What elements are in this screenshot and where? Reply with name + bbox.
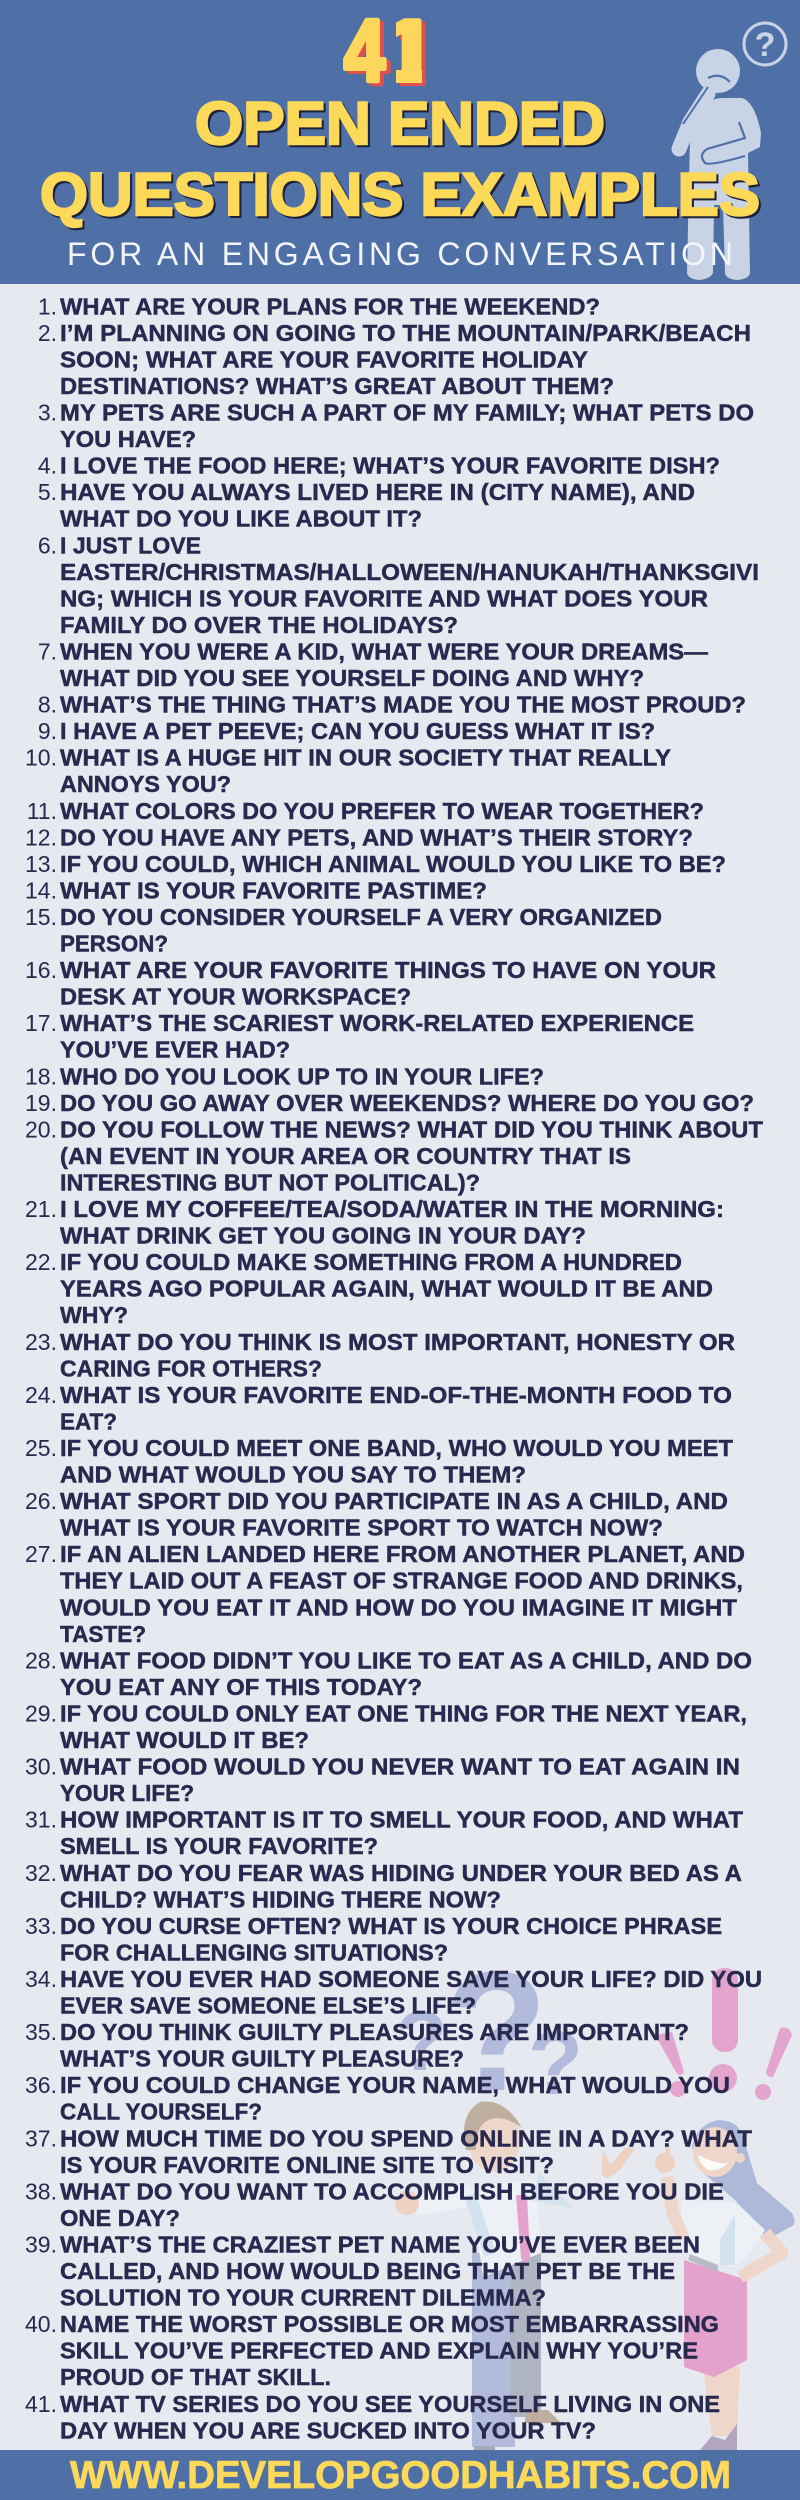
- question 17: YOU’VE EVER HAD?: [60, 1037, 290, 1063]
- subtitle: FOR AN ENGAGING CONVERSATION: [67, 236, 733, 272]
- question 24: [25, 1382, 732, 1434]
- question 17: [25, 1010, 694, 1063]
- question 3: [38, 400, 754, 452]
- question 32: WHAT DO YOU FEAR WAS HIDING UNDER YOUR BED AS A: [60, 1860, 742, 1886]
- question 6: FAMILY DO OVER THE HOLIDAYS?: [60, 612, 458, 638]
- title: [40, 90, 760, 228]
- question 18: 18.: [25, 1063, 57, 1089]
- icon: thinking person: [679, 23, 786, 280]
- question 17: 17.: [25, 1010, 57, 1036]
- question 2: 2.: [38, 320, 57, 346]
- question 21: I LOVE MY COFFEE/TEA/SODA/WATER IN THE MORNING:: [60, 1196, 724, 1222]
- question 14: WHAT IS YOUR FAVORITE PASTIME?: [60, 877, 487, 903]
- question 32: [25, 1860, 742, 1912]
- question 4: 4.: [38, 453, 57, 479]
- question 25: IF YOU COULD MEET ONE BAND, WHO WOULD YOU MEET: [60, 1435, 733, 1461]
- question 16: [25, 957, 716, 1010]
- question 24: EAT?: [60, 1408, 117, 1434]
- question 16: WHAT ARE YOUR FAVORITE THINGS TO HAVE ON YOUR: [60, 957, 716, 983]
- question 25: AND WHAT WOULD YOU SAY TO THEM?: [60, 1462, 526, 1488]
- question 37: IS YOUR FAVORITE ONLINE SITE TO VISIT?: [60, 2152, 554, 2178]
- question 21: [25, 1196, 724, 1249]
- question 27: TASTE?: [60, 1621, 146, 1647]
- question 14: 14.: [25, 877, 57, 903]
- question 35: [25, 2019, 689, 2072]
- question 13: IF YOU COULD, WHICH ANIMAL WOULD YOU LIKE TO BE?: [60, 851, 726, 877]
- question 11: 11.: [27, 798, 57, 824]
- question 6: [38, 532, 759, 638]
- question 34: [25, 1966, 762, 2018]
- question 38: 38.: [25, 2178, 57, 2204]
- question 20: (AN EVENT IN YOUR AREA OR COUNTRY THAT IS: [60, 1143, 631, 1169]
- question 34: 34.: [25, 1966, 57, 1992]
- question 3: MY PETS ARE SUCH A PART OF MY FAMILY; WHAT PETS DO: [60, 400, 754, 426]
- question 36: IF YOU COULD CHANGE YOUR NAME, WHAT WOULD YOU: [60, 2072, 730, 2098]
- question 2: DESTINATIONS? WHAT’S GREAT ABOUT THEM?: [60, 373, 614, 399]
- question 20: DO YOU FOLLOW THE NEWS? WHAT DID YOU THINK ABOUT: [60, 1116, 763, 1142]
- question 36: CALL YOURSELF?: [60, 2099, 262, 2125]
- question 8: 8.: [38, 692, 57, 718]
- question 31: HOW IMPORTANT IS IT TO SMELL YOUR FOOD, AND WHAT: [60, 1807, 743, 1833]
- question 15: PERSON?: [60, 930, 168, 956]
- question 35: WHAT’S YOUR GUILTY PLEASURE?: [60, 2046, 464, 2072]
- footer band: [0, 2450, 800, 2500]
- question 28: 28.: [25, 1647, 57, 1673]
- question 15: DO YOU CONSIDER YOURSELF A VERY ORGANIZED: [60, 904, 662, 930]
- question 39: WHAT’S THE CRAZIEST PET NAME YOU’VE EVER BEEN: [60, 2232, 700, 2258]
- question 31: 31.: [25, 1807, 57, 1833]
- question 6: I JUST LOVE: [60, 532, 201, 558]
- question 40: PROUD OF THAT SKILL.: [60, 2364, 331, 2390]
- question 33: [25, 1913, 722, 1965]
- illustration: man: [395, 2102, 635, 2450]
- question 5: HAVE YOU ALWAYS LIVED HERE IN (CITY NAME), AND: [60, 479, 695, 505]
- question 23: CARING FOR OTHERS?: [60, 1355, 322, 1381]
- question 10: ANNOYS YOU?: [60, 771, 231, 797]
- question 39: SOLUTION TO YOUR CURRENT DILEMMA?: [60, 2285, 546, 2311]
- question 36: 36.: [25, 2072, 57, 2098]
- question 29: WHAT WOULD IT BE?: [60, 1727, 309, 1753]
- question 11: WHAT COLORS DO YOU PREFER TO WEAR TOGETHER?: [60, 798, 704, 824]
- question 33: FOR CHALLENGING SITUATIONS?: [60, 1939, 448, 1965]
- illustration: question marks: ?: [396, 1994, 447, 2088]
- question 12: 12.: [25, 824, 57, 850]
- question 7: 7.: [38, 638, 57, 664]
- question 5: WHAT DO YOU LIKE ABOUT IT?: [60, 506, 422, 532]
- illustration: question marks: ?: [528, 2014, 583, 2114]
- question 2: I’M PLANNING ON GOING TO THE MOUNTAIN/PARK/BEACH: [60, 320, 751, 346]
- question 17: WHAT’S THE SCARIEST WORK-RELATED EXPERIENCE: [60, 1010, 694, 1036]
- question 20: INTERESTING BUT NOT POLITICAL)?: [60, 1170, 480, 1196]
- question 12: DO YOU HAVE ANY PETS, AND WHAT’S THEIR STORY?: [60, 824, 693, 850]
- question 38: ONE DAY?: [60, 2205, 180, 2231]
- question 22: [25, 1249, 713, 1328]
- question 6: NG; WHICH IS YOUR FAVORITE AND WHAT DOES YOUR: [60, 585, 708, 611]
- title: QUESTIONS EXAMPLES: [40, 161, 760, 228]
- title number 41: 4: [344, 1, 385, 100]
- question 22: WHY?: [60, 1302, 128, 1328]
- question 10: [25, 745, 671, 797]
- question 2: SOON; WHAT ARE YOUR FAVORITE HOLIDAY: [60, 346, 588, 372]
- question 27: IF AN ALIEN LANDED HERE FROM ANOTHER PLANET, AND: [60, 1541, 745, 1567]
- question 33: 33.: [25, 1913, 57, 1939]
- question 40: SKILL YOU’VE PERFECTED AND EXPLAIN WHY YOU’RE: [60, 2338, 698, 2364]
- question 37: HOW MUCH TIME DO YOU SPEND ONLINE IN A DAY? WHAT: [60, 2125, 752, 2151]
- question 40: [25, 2311, 719, 2390]
- question 39: CALLED, AND HOW WOULD BEING THAT PET BE THE: [60, 2258, 675, 2284]
- question 35: DO YOU THINK GUILTY PLEASURES ARE IMPORTANT?: [60, 2019, 689, 2045]
- question 34: EVER SAVE SOMEONE ELSE’S LIFE?: [60, 1992, 476, 2018]
- illustration: question marks: ?: [444, 1937, 548, 2127]
- question 30: 30.: [25, 1754, 57, 1780]
- question 7: WHEN YOU WERE A KID, WHAT WERE YOUR DREAMS—: [60, 638, 708, 664]
- title: OPEN ENDED: [195, 90, 605, 157]
- question 19: 19.: [25, 1090, 57, 1116]
- question 2: [38, 320, 751, 399]
- question 23: 23.: [25, 1329, 57, 1355]
- question 32: 32.: [25, 1860, 57, 1886]
- question 32: CHILD? WHAT’S HIDING THERE NOW?: [60, 1886, 501, 1912]
- question 7: WHAT DID YOU SEE YOURSELF DOING AND WHY?: [60, 665, 644, 691]
- question 28: WHAT FOOD DIDN’T YOU LIKE TO EAT AS A CHILD, AND DO: [60, 1647, 752, 1673]
- illustration: woman: [655, 2120, 795, 2450]
- question 30: WHAT FOOD WOULD YOU NEVER WANT TO EAT AGAIN IN: [60, 1754, 740, 1780]
- question 33: DO YOU CURSE OFTEN? WHAT IS YOUR CHOICE PHRASE: [60, 1913, 722, 1939]
- question 31: [25, 1807, 743, 1859]
- question 29: IF YOU COULD ONLY EAT ONE THING FOR THE NEXT YEAR,: [60, 1700, 747, 1726]
- question 6: 6.: [38, 532, 57, 558]
- question 1: WHAT ARE YOUR PLANS FOR THE WEEKEND?: [60, 293, 600, 319]
- footer website url: WWW.DEVELOPGOODHABITS.COM: [70, 2454, 731, 2497]
- question 40: NAME THE WORST POSSIBLE OR MOST EMBARRASSING: [60, 2311, 719, 2337]
- header band: [0, 0, 800, 284]
- question 10: WHAT IS A HUGE HIT IN OUR SOCIETY THAT REALLY: [60, 745, 671, 771]
- question 20: [25, 1116, 763, 1196]
- question 27: WOULD YOU EAT IT AND HOW DO YOU IMAGINE IT MIGHT: [60, 1594, 737, 1620]
- question 3: 3.: [38, 400, 57, 426]
- question 22: 22.: [25, 1249, 57, 1275]
- question 25: [25, 1435, 733, 1488]
- question 23: [25, 1329, 735, 1381]
- question 41: WHAT TV SERIES DO YOU SEE YOURSELF LIVING IN ONE: [60, 2391, 720, 2417]
- question 27: [25, 1541, 745, 1647]
- question 41: 41.: [25, 2391, 57, 2417]
- question 28: YOU EAT ANY OF THIS TODAY?: [60, 1674, 422, 1700]
- icon: thinking person: ?: [755, 26, 775, 64]
- question 39: 39.: [25, 2232, 57, 2258]
- question 28: [25, 1647, 752, 1700]
- question 24: WHAT IS YOUR FAVORITE END-OF-THE-MONTH FOOD TO: [60, 1382, 732, 1408]
- question 15: 15.: [25, 904, 57, 930]
- question 27: 27.: [25, 1541, 57, 1567]
- question 38: WHAT DO YOU WANT TO ACCOMPLISH BEFORE YOU DIE: [60, 2178, 724, 2204]
- question 5: [38, 479, 695, 532]
- question 34: HAVE YOU EVER HAD SOMEONE SAVE YOUR LIFE? DID YOU: [60, 1966, 762, 1992]
- title number 41: 1: [379, 1, 439, 100]
- question 41: DAY WHEN YOU ARE SUCKED INTO YOUR TV?: [60, 2417, 596, 2443]
- question 8: WHAT’S THE THING THAT’S MADE YOU THE MOST PROUD?: [60, 692, 746, 718]
- question 40: 40.: [25, 2311, 57, 2337]
- question 29: [25, 1700, 747, 1753]
- question 27: THEY LAID OUT A FEAST OF STRANGE FOOD AND DRINKS,: [60, 1568, 743, 1594]
- question 26: WHAT IS YOUR FAVORITE SPORT TO WATCH NOW?: [60, 1515, 663, 1541]
- question 9: I HAVE A PET PEEVE; CAN YOU GUESS WHAT IT IS?: [60, 718, 655, 744]
- illustration: exclamation marks: [655, 1968, 792, 2100]
- question 5: 5.: [38, 479, 57, 505]
- question 1: 1.: [38, 293, 57, 319]
- question 16: DESK AT YOUR WORKSPACE?: [60, 984, 411, 1010]
- question 20: 20.: [25, 1116, 57, 1142]
- question 30: [25, 1754, 740, 1806]
- question 30: YOUR LIFE?: [60, 1780, 194, 1806]
- question 25: 25.: [25, 1435, 57, 1461]
- question 9: 9.: [38, 718, 57, 744]
- question 26: WHAT SPORT DID YOU PARTICIPATE IN AS A CHILD, AND: [60, 1488, 728, 1514]
- question 4: I LOVE THE FOOD HERE; WHAT’S YOUR FAVORITE DISH?: [60, 453, 720, 479]
- question 22: IF YOU COULD MAKE SOMETHING FROM A HUNDRED: [60, 1249, 682, 1275]
- question 37: 37.: [25, 2125, 57, 2151]
- question 39: [25, 2232, 700, 2311]
- question 31: SMELL IS YOUR FAVORITE?: [60, 1833, 378, 1859]
- question 7: [38, 638, 708, 691]
- title number 41: [343, 18, 426, 86]
- question 38: [25, 2178, 724, 2231]
- question 21: WHAT DRINK GET YOU GOING IN YOUR DAY?: [60, 1223, 586, 1249]
- question 35: 35.: [25, 2019, 57, 2045]
- question 6: EASTER/CHRISTMAS/HALLOWEEN/HANUKAH/THANKSGIVI: [60, 559, 759, 585]
- question 15: [25, 904, 662, 956]
- question 23: WHAT DO YOU THINK IS MOST IMPORTANT, HONESTY OR: [60, 1329, 735, 1355]
- question 19: DO YOU GO AWAY OVER WEEKENDS? WHERE DO YOU GO?: [60, 1090, 754, 1116]
- question 22: YEARS AGO POPULAR AGAIN, WHAT WOULD IT BE AND: [60, 1276, 713, 1302]
- question 13: 13.: [25, 851, 57, 877]
- question 21: 21.: [25, 1196, 57, 1222]
- question 24: 24.: [25, 1382, 57, 1408]
- question 29: 29.: [25, 1700, 57, 1726]
- illustration: question marks: [396, 1937, 583, 2127]
- question list: [25, 293, 763, 2443]
- question 37: [25, 2125, 752, 2178]
- question 3: YOU HAVE?: [60, 426, 196, 452]
- question 41: [25, 2391, 720, 2443]
- question 36: [25, 2072, 730, 2125]
- question 10: 10.: [25, 745, 57, 771]
- question 16: 16.: [25, 957, 57, 983]
- question 18: WHO DO YOU LOOK UP TO IN YOUR LIFE?: [60, 1063, 544, 1089]
- question 26: 26.: [25, 1488, 57, 1514]
- question 26: [25, 1488, 728, 1541]
